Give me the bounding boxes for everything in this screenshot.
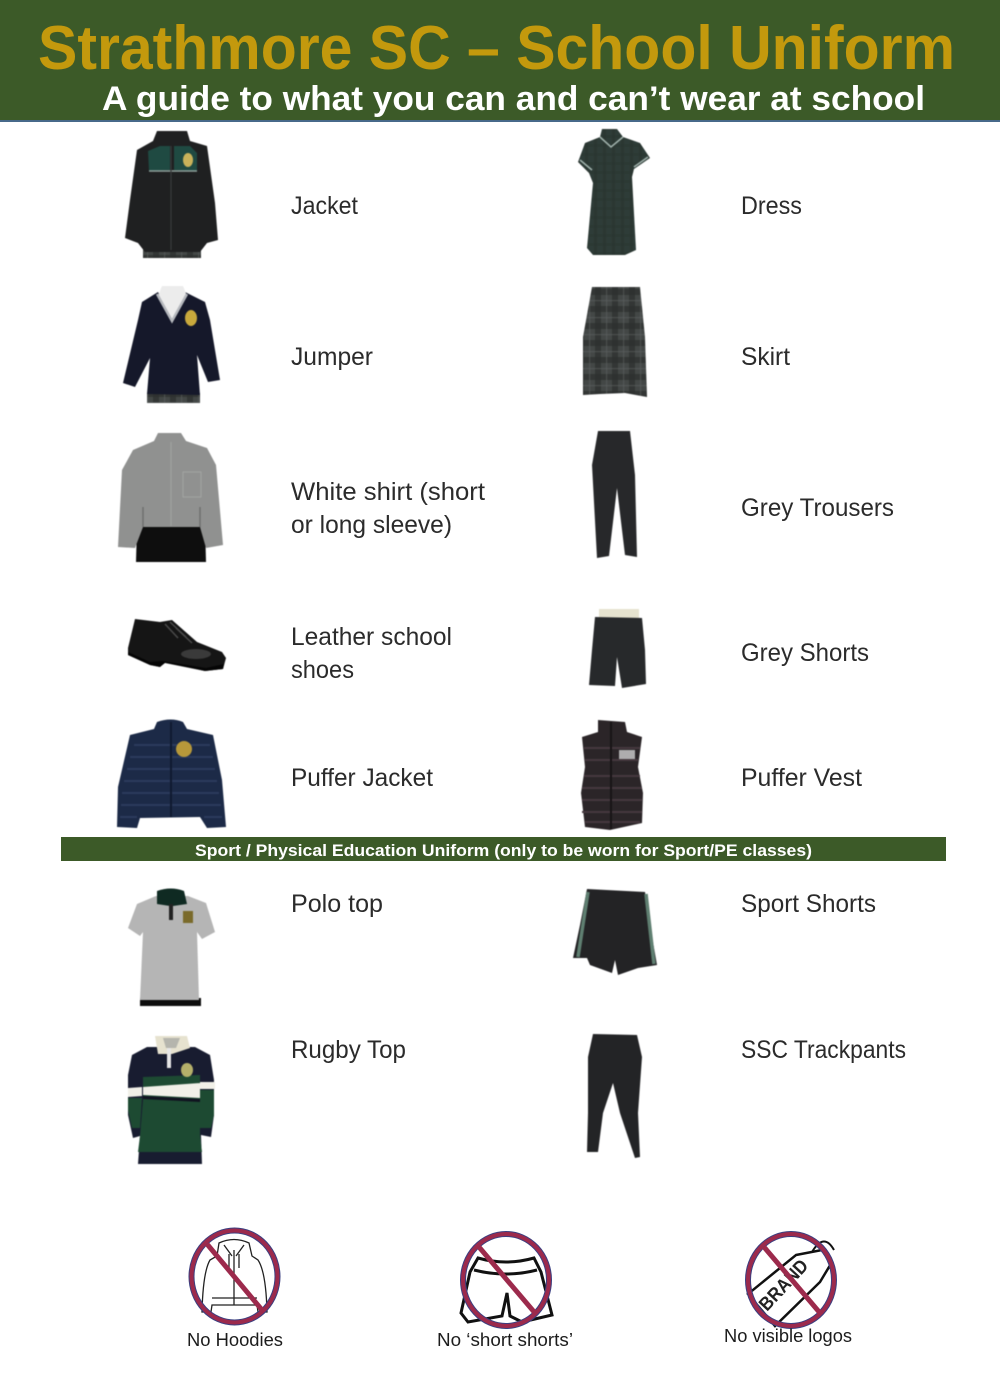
icon: no visible logos <box>724 1234 852 1346</box>
label: Puffer Jacket <box>291 764 433 792</box>
label: No ‘short shorts’ <box>437 1330 573 1350</box>
item: puffer jacket <box>117 720 433 828</box>
item: puffer vest <box>581 720 862 830</box>
label: No visible logos <box>724 1326 852 1346</box>
header banner <box>0 0 1000 122</box>
label: Polo top <box>291 890 383 918</box>
label: Skirt <box>741 343 790 371</box>
item: grey trousers <box>592 431 894 558</box>
label: No Hoodies <box>187 1330 283 1350</box>
label: Dress <box>741 192 802 220</box>
item: leather shoes <box>128 619 452 684</box>
item: jacket <box>125 131 358 258</box>
label: SSC Trackpants <box>741 1036 906 1064</box>
subtitle: A guide to what you can and can’t wear at school <box>102 80 925 118</box>
icon: no hoodies <box>187 1230 283 1350</box>
item: leather shoes: shoes <box>291 656 354 684</box>
item: dress <box>578 129 802 255</box>
title: Strathmore SC – School Uniform <box>38 14 955 83</box>
label: Leather school <box>291 623 452 651</box>
item: jumper <box>123 286 373 403</box>
item: skirt <box>583 287 790 397</box>
label: Rugby Top <box>291 1036 406 1064</box>
sport section banner <box>61 837 946 861</box>
item: SSC trackpants <box>587 1034 906 1158</box>
item: white shirt <box>118 433 485 562</box>
label: Sport Shorts <box>741 890 876 918</box>
label: Puffer Vest <box>741 764 862 792</box>
item: sport shorts <box>573 889 876 975</box>
label: White shirt (short <box>291 478 485 506</box>
icon: no short shorts <box>437 1234 573 1350</box>
item: grey shorts <box>589 609 869 688</box>
label: Grey Shorts <box>741 639 869 667</box>
item: rugby top <box>128 1036 406 1164</box>
banner text: Sport / Physical Education Uniform (only to be worn for Sport/PE classes) <box>195 841 812 860</box>
item: polo top <box>128 888 383 1006</box>
item: white shirt: or long sleeve) <box>291 511 452 539</box>
label: Jacket <box>291 192 358 220</box>
label: Jumper <box>291 343 373 371</box>
icon: no visible logos: BRAND <box>755 1256 813 1315</box>
label: Grey Trousers <box>741 494 894 522</box>
